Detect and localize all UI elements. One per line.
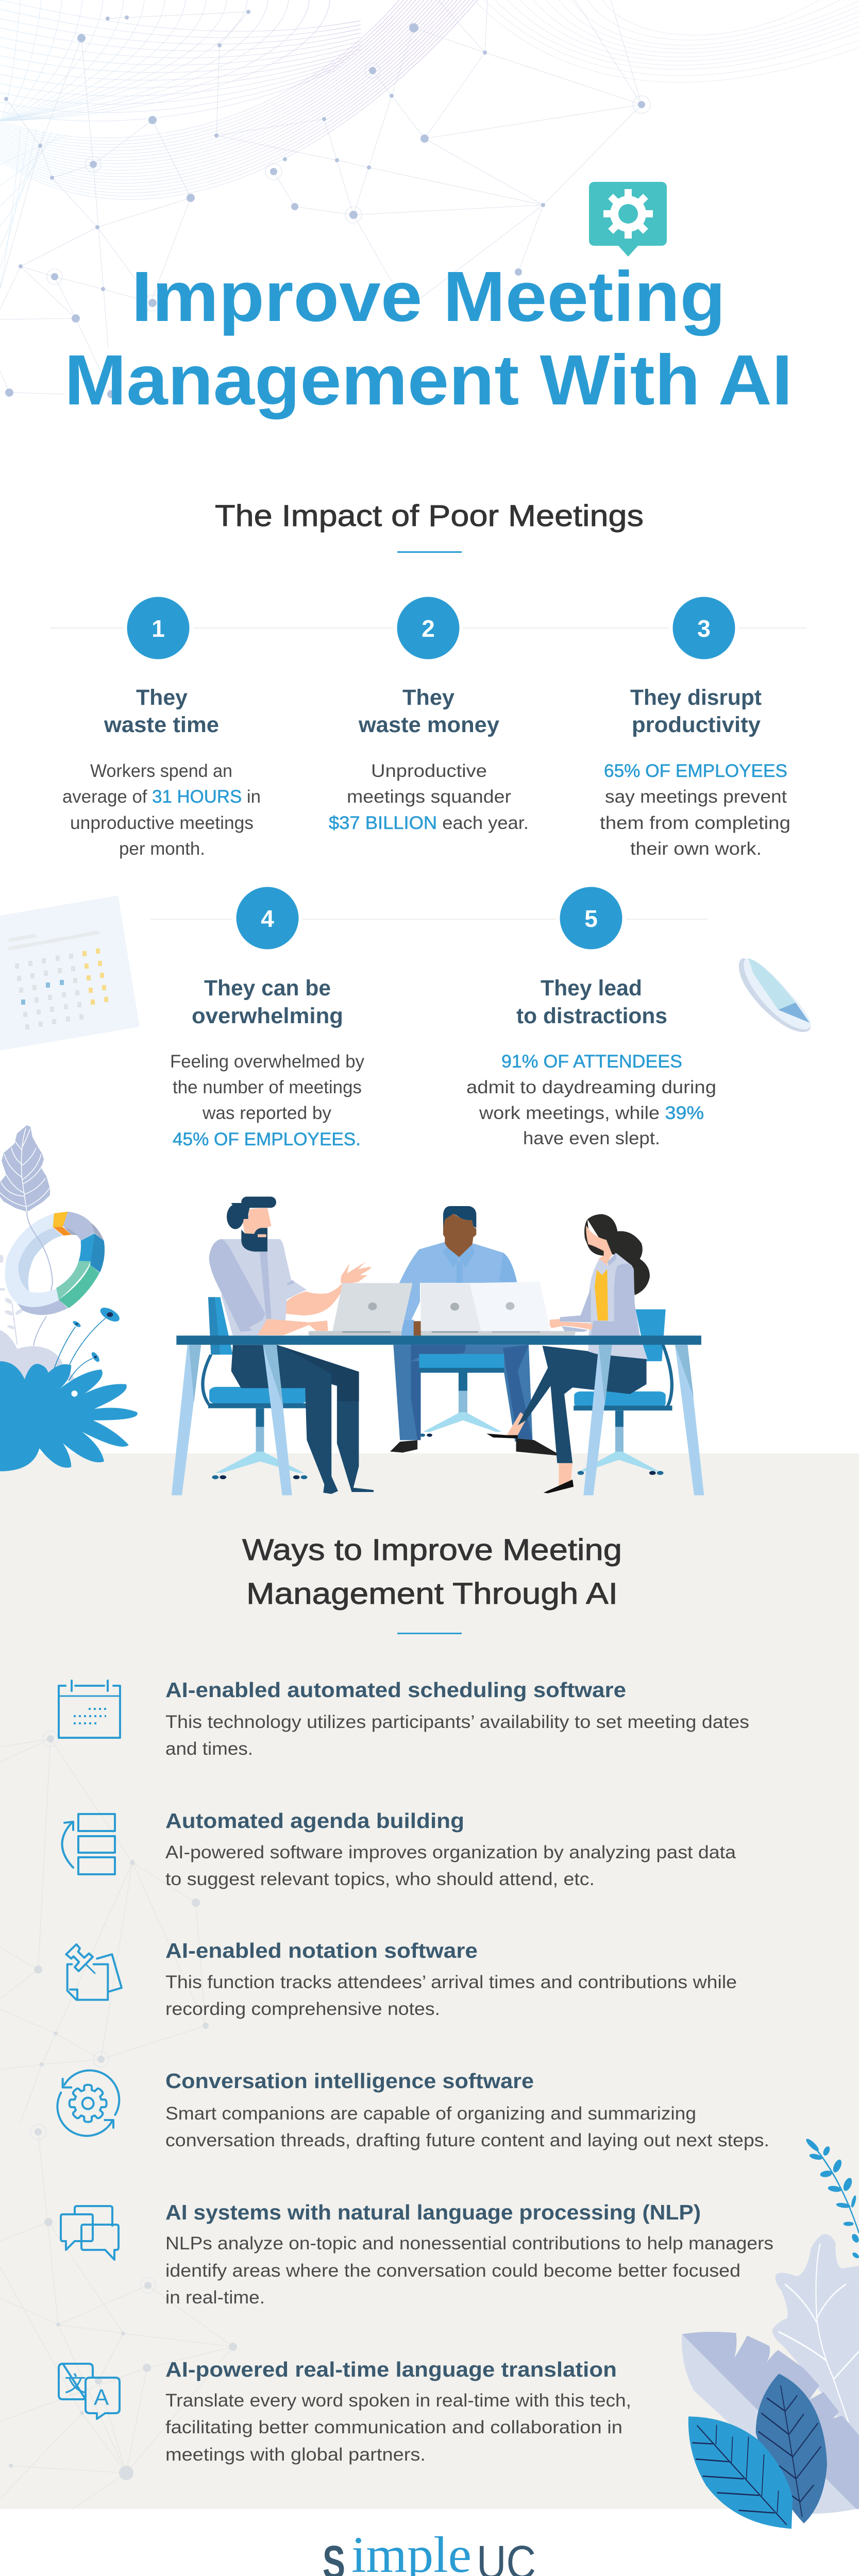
panel: impact 1: per month. (119, 839, 205, 859)
panel: impact 3: them from completing (600, 813, 790, 833)
panel: impact 1: waste time (104, 713, 219, 737)
title: Management With AI (64, 341, 793, 420)
text: scheduling software: and times. (165, 1739, 253, 1759)
panel: impact 1: 1 (151, 615, 165, 642)
text: agenda building (165, 1809, 736, 1889)
panel: impact 5: admit to daydreaming during (466, 1077, 716, 1097)
text: scheduling software: This technology utilizes participants’ availability to set meeting dates (165, 1712, 749, 1732)
panel: impact 4: was reported by (202, 1103, 331, 1123)
panel: impact 3: They disrupt (630, 685, 762, 710)
icon: blue sprig (805, 2137, 859, 2292)
panel: impact 5: 5 (584, 905, 598, 932)
background: network nodes and lines (0, 0, 650, 398)
text: NLP: AI systems with natural language processing (NLP) (165, 2200, 701, 2224)
icon: dark leaf (756, 2374, 827, 2523)
panel: impact 4: Feeling overwhelmed by (170, 1052, 364, 1072)
heading: The Impact of Poor Meetings: The Impact of Poor Meetings (215, 499, 644, 533)
panel: impact 1 (62, 593, 261, 859)
illustration: calendar card (0, 895, 140, 1050)
panel: impact 5: have even slept. (523, 1128, 660, 1148)
table (172, 1335, 704, 1495)
icon: overlapping speech bubbles (61, 2206, 119, 2260)
icon: small star (71, 1391, 77, 1397)
panel: impact 2 (329, 593, 529, 833)
icon: pale leaf (0, 1125, 50, 1212)
panel: impact 2: meetings squander (347, 787, 511, 807)
panel: impact 5: work meetings, while 39% (479, 1103, 704, 1123)
timeline row 1 (50, 628, 807, 629)
text: scheduling software: AI-enabled automated scheduling software (165, 1678, 626, 1702)
illustration: meeting around table (172, 1197, 704, 1495)
text: language translation: meetings with global partners. (165, 2445, 426, 2465)
divider (397, 1633, 462, 1634)
text: language translation: Translate every word spoken in real-time with this tech, (165, 2391, 631, 2411)
panel: impact 3: 65% OF EMPLOYEES (604, 761, 787, 781)
text: language translation: AI-powered real-time language translation (165, 2358, 617, 2381)
text: agenda building: AI-powered software improves organization by analyzing past data (165, 1842, 736, 1862)
chair: centre (419, 1372, 502, 1437)
panel: impact 3: their own work. (630, 839, 762, 859)
text: agenda building: Automated agenda building (165, 1809, 464, 1833)
icon: flowers (54, 1305, 122, 1381)
illustration: plant and donut chart (0, 1125, 138, 1471)
icon: pale lobed leaf (772, 2234, 859, 2464)
heading: Ways to Improve Meeting Management Through AI: Ways to Improve Meeting (242, 1533, 622, 1567)
heading: Ways to Improve Meeting Management Through AI: Management Through AI (246, 1577, 618, 1611)
panel: impact 3: 3 (697, 615, 711, 642)
text: scheduling software (165, 1678, 749, 1759)
panel: impact 2: $37 BILLION each year. (329, 813, 529, 833)
illustration: tilted disk (739, 958, 811, 1032)
icon: blue bush (0, 1361, 138, 1471)
text: language translation (165, 2358, 631, 2465)
panel: impact 4: overwhelming (192, 1004, 343, 1028)
text: notation software: recording comprehensive notes. (165, 1999, 440, 2019)
panel: impact 2: waste money (358, 713, 499, 737)
panel: impact 5: to distractions (516, 1004, 667, 1028)
chair: left (203, 1297, 307, 1479)
panel: impact 2: 2 (422, 615, 435, 642)
background: faint network on grey panel (0, 1731, 237, 2509)
donut chart (5, 1212, 105, 1315)
icon: mid leaf light half (682, 2334, 856, 2514)
panel: impact 5: They lead (541, 976, 642, 1001)
panel: impact 1: Workers spend an (90, 761, 232, 781)
heading: Ways to Improve Meeting Management Through AI (242, 1533, 622, 1611)
panel: impact 1: average of 31 HOURS in (62, 787, 261, 807)
icon: gear with arrows (57, 2071, 119, 2136)
person: woman (486, 1214, 650, 1494)
icon: gear speech bubble (589, 182, 667, 257)
panel: impact 3 (600, 593, 790, 859)
icon: blue leaf (688, 2416, 793, 2529)
icon: agenda blocks (62, 1814, 115, 1874)
icon: stem (27, 1212, 53, 1346)
text: conversation intelligence: Smart companions are capable of organizing and summarizing (165, 2104, 696, 2124)
panel: impact 4: 45% OF EMPLOYEES. (173, 1129, 361, 1149)
icon: mid leaf dark half (682, 2332, 859, 2509)
panel: impact 5 (466, 883, 716, 1148)
icon: translation bubbles (59, 2364, 120, 2419)
panel: impact 4: They can be (204, 976, 331, 1001)
person: left man (209, 1197, 374, 1494)
background: wave mesh (0, 0, 478, 289)
icon: translation bubbles: 文 (64, 2372, 86, 2396)
laptops (309, 1282, 575, 1335)
logo: SimpleUC (323, 2526, 536, 2576)
panel: impact 4: the number of meetings (173, 1077, 362, 1097)
text: notation software (165, 1939, 737, 2019)
panel: impact 1: unproductive meetings (70, 813, 254, 833)
icon: grey bush and small plant (0, 1255, 77, 1381)
icon: calendar (59, 1681, 120, 1738)
text: NLP: in real-time. (165, 2287, 265, 2308)
panel: impact 5: 91% OF ATTENDEES (501, 1052, 682, 1072)
panel: impact 3: productivity (632, 713, 761, 737)
text: NLP: NLPs analyze on-topic and nonessential contributions to help managers (165, 2233, 773, 2253)
text: notation software: This function tracks attendees’ arrival times and contributions while (165, 1972, 737, 1992)
panel: impact 3: say meetings prevent (605, 787, 787, 807)
background: faint top right waves (474, 0, 859, 82)
panel: impact 4: 4 (261, 905, 274, 932)
panel: ways background (0, 1453, 859, 2509)
title (64, 257, 793, 420)
panel: impact 2: They (402, 685, 454, 710)
timeline row 2 (150, 919, 708, 920)
text: NLP (165, 2200, 773, 2308)
illustration: leaves bottom right (682, 2137, 859, 2529)
text: language translation: facilitating better communication and collaboration in (165, 2417, 622, 2437)
title: Improve Meeting (131, 257, 726, 336)
icon: translation bubbles: A (94, 2385, 109, 2410)
chair: right (574, 1309, 672, 1475)
divider (397, 551, 462, 553)
panel: impact 2: Unproductive (371, 761, 487, 781)
panel: impact 1: They (136, 685, 188, 710)
icon: pinned notes (66, 1944, 122, 2000)
panel: impact 4 (170, 883, 364, 1149)
text: conversation intelligence: conversation threads, drafting future content and laying out next steps. (165, 2130, 769, 2150)
text: notation software: AI-enabled notation software (165, 1939, 478, 1962)
text: conversation intelligence (165, 2069, 769, 2150)
person: centre man (390, 1206, 557, 1455)
text: conversation intelligence: Conversation intelligence software (165, 2069, 534, 2093)
text: NLP: identify areas where the conversation could become better focused (165, 2261, 740, 2281)
text: agenda building: to suggest relevant topics, who should attend, etc. (165, 1869, 595, 1889)
